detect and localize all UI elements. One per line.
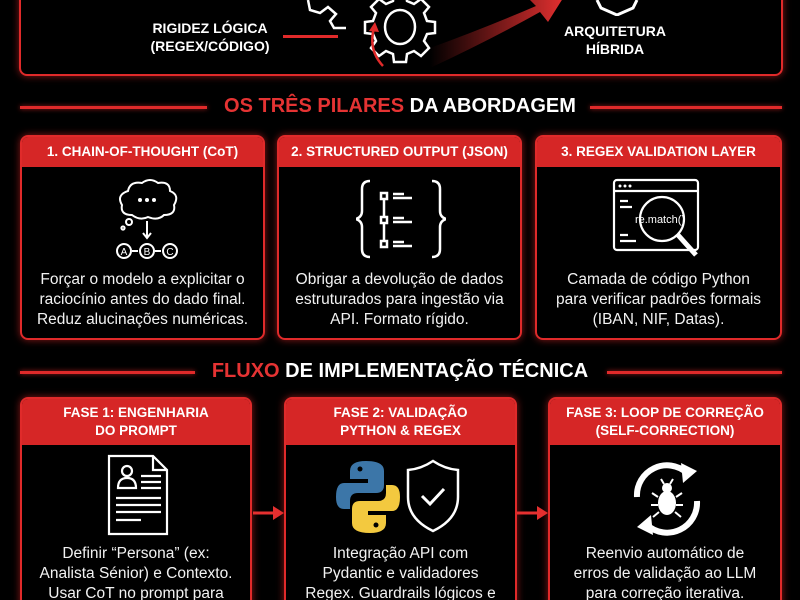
icon: json braces [356,180,446,258]
header: FASE 1: ENGENHARIA [63,405,209,420]
header: 1. CHAIN-OF-THOUGHT (CoT) [47,144,238,159]
text: Reenvio automático de [586,545,744,562]
text: Camada de código Python [567,271,750,288]
text: API. Formato rígido. [330,311,469,328]
icon: code window magnifier: re.match() [635,214,685,226]
header: (SELF-CORRECTION) [596,423,734,438]
icon: python and shield [336,460,460,533]
header: 3. REGEX VALIDATION LAYER [561,144,756,159]
text: Analista Sénior) e Contexto. [40,565,232,582]
header [279,137,520,167]
arrow 1 [253,506,284,520]
panel: regex validation [535,135,782,340]
text: Obrigar a devolução de dados [296,271,503,288]
icon: document persona [108,454,168,536]
text: (IBAN, NIF, Datas). [593,311,724,328]
header [22,137,263,167]
text: raciocínio antes do dado final. [40,291,245,308]
text [556,271,761,328]
header [22,399,250,445]
panel: fase 1 [20,397,252,600]
panel: fase 3 [548,397,782,600]
arrow 2 [517,506,548,520]
text: para verificar padrões formais [556,291,761,308]
header: FASE 3: LOOP DE CORREÇÃO [566,405,764,420]
text [574,545,756,600]
icon: code window magnifier [612,178,700,257]
icon: thought cloud: A [121,247,128,258]
icon: thought cloud: C [166,247,174,258]
text: arquitetura híbrida: HÍBRIDA [586,41,644,57]
heading: fluxo de implementação: FLUXO DE IMPLEMENTAÇÃO TÉCNICA [212,360,588,382]
text: Reduz alucinações numéricas. [37,311,248,328]
icon: thought cloud: B [144,247,151,258]
text: erros de validação ao LLM [574,565,756,582]
text: Integração API com [333,545,468,562]
heading: os três pilares: OS TRÊS PILARES DA ABORDAGEM [224,95,576,117]
header [537,137,780,167]
panel: fase 2 [284,397,517,600]
text [37,271,248,328]
text: arquitetura híbrida [564,23,666,57]
text [40,545,232,600]
header: PYTHON & REGEX [340,423,461,438]
text: estruturados para ingestão via [295,291,504,308]
icon: thought cloud [116,179,178,259]
header [550,399,780,445]
header: DO PROMPT [95,423,177,438]
text: rigidez lógica [150,20,270,54]
icon: cycle bug [634,462,700,536]
text: Definir “Persona” (ex: [62,545,210,562]
text: rigidez lógica: RIGIDEZ LÓGICA [152,20,268,36]
panel: structured output [277,135,522,340]
text: rigidez lógica: (REGEX/CÓDIGO) [150,38,270,54]
header: 2. STRUCTURED OUTPUT (JSON) [291,144,508,159]
header [286,399,515,445]
text: Forçar o modelo a explicitar o [40,271,245,288]
icon: gears with arrows [306,0,562,67]
text: arquitetura híbrida: ARQUITETURA [564,23,666,39]
text: Pydantic e validadores [323,565,478,582]
header: FASE 2: VALIDAÇÃO [333,405,468,420]
icon: shield [596,0,638,16]
text [305,545,496,600]
panel: top hybrid architecture [19,0,783,76]
connector line [283,35,338,38]
panel: chain-of-thought [20,135,265,340]
text [295,271,504,328]
